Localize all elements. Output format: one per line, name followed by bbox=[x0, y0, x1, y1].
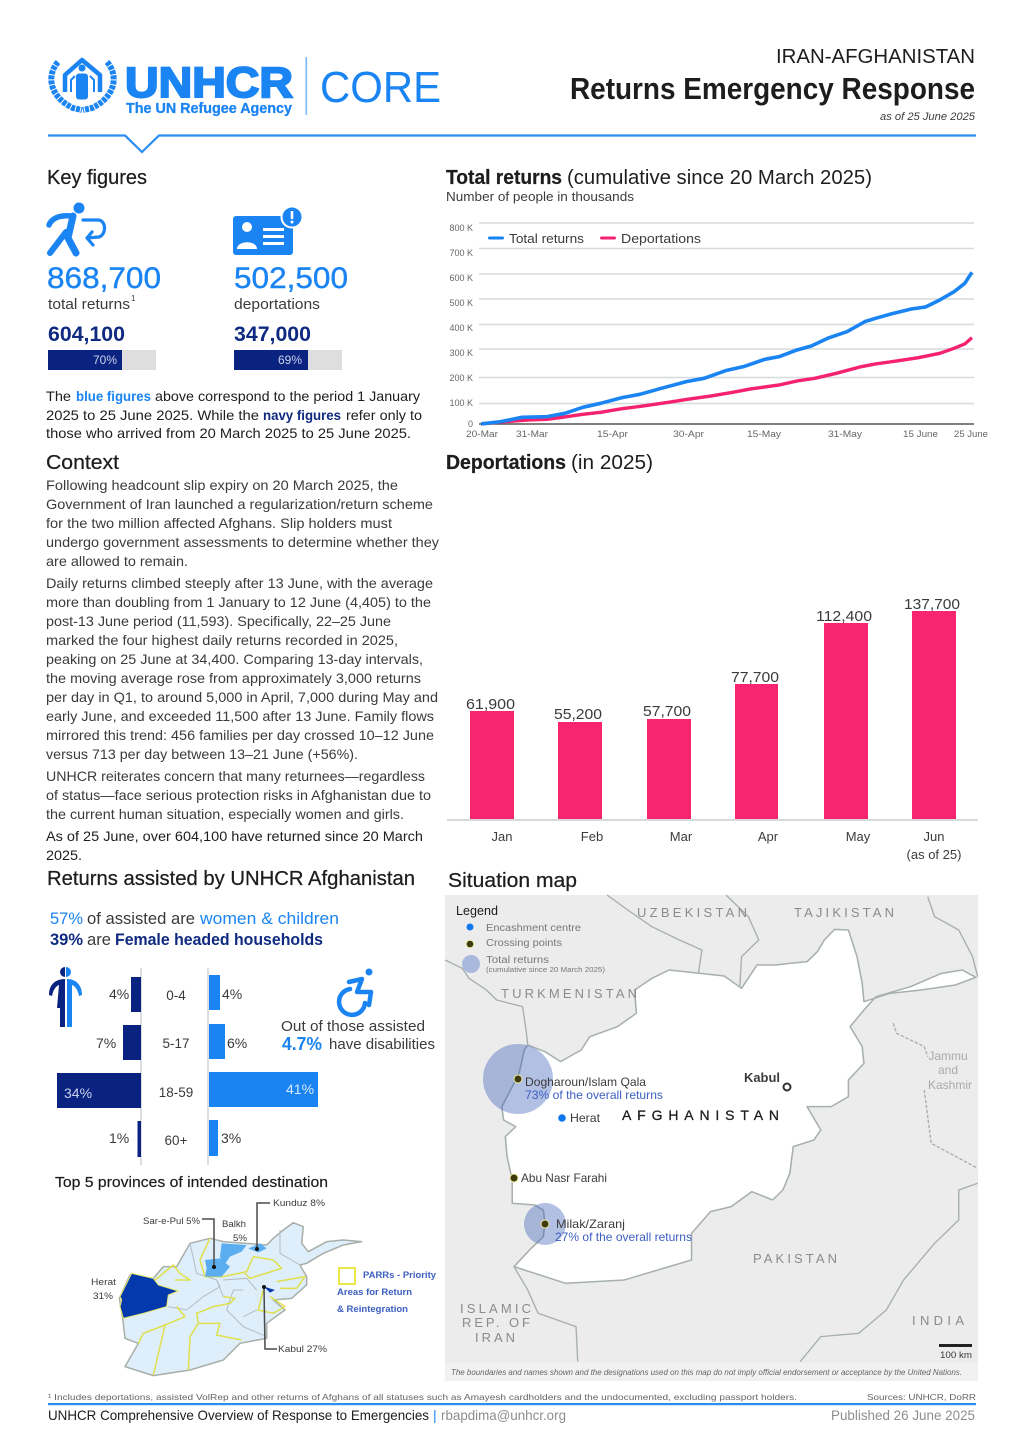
panel: total returns line chart bbox=[446, 166, 988, 439]
return circles bbox=[483, 1044, 553, 1114]
footer bbox=[48, 1392, 976, 1423]
country labels: Jammu bbox=[928, 1049, 968, 1063]
y axis labels: 0 bbox=[468, 419, 473, 429]
disability note bbox=[281, 1018, 435, 1054]
series: total returns bbox=[481, 272, 972, 424]
pyramid values: 7% bbox=[96, 1035, 116, 1051]
stat: total returns bbox=[47, 262, 161, 370]
y axis labels: 500 K bbox=[449, 298, 473, 308]
age groups bbox=[159, 988, 193, 1148]
y axis labels: 100 K bbox=[449, 398, 473, 408]
country labels: UZBEKISTAN bbox=[637, 905, 747, 920]
icon: woman and man bbox=[49, 967, 82, 1027]
provinces map: Kabul 27% bbox=[278, 1344, 327, 1354]
logo wordmark bbox=[125, 57, 441, 117]
key figures note: above correspond to the period 1 January bbox=[155, 388, 420, 404]
chart legend: Deportations bbox=[621, 231, 702, 246]
map legend: (cumulative since 20 March 2025) bbox=[486, 967, 605, 974]
Afghanistan territory bbox=[502, 929, 976, 1283]
x axis labels: 31-May bbox=[828, 429, 863, 439]
footnote: ¹ Includes deportations, assisted VolRep and other returns of Afghans of all statuses such as Amayesh cardholders and the undocumented, excluding passport holders. bbox=[48, 1392, 797, 1402]
provinces map: Sar-e-Pul 5% bbox=[143, 1216, 200, 1226]
logo wordmark: UNHCR bbox=[125, 59, 293, 107]
heading: deportations: Deportations bbox=[446, 451, 566, 474]
crossing points bbox=[510, 1075, 549, 1228]
country labels bbox=[460, 905, 972, 1345]
report title bbox=[570, 46, 976, 123]
y axis labels: 600 K bbox=[449, 273, 473, 283]
PARRs legend: PARRs - Priority bbox=[363, 1270, 436, 1280]
map labels: Herat bbox=[570, 1111, 601, 1125]
scale bar: 100 km bbox=[940, 1350, 972, 1360]
footer line: | bbox=[433, 1407, 437, 1423]
disability note: have disabilities bbox=[329, 1036, 435, 1053]
key figures note: those who arrived from 20 March 2025 to 25 June 2025. bbox=[46, 425, 411, 441]
icon: UNHCR emblem bbox=[51, 60, 114, 110]
stat: deportations: 347,000 bbox=[234, 323, 311, 346]
key figures note: blue figures bbox=[76, 388, 151, 404]
key figures note: The bbox=[46, 388, 71, 404]
x axis labels: 30-Apr bbox=[673, 429, 704, 439]
PARRs legend: Areas for Return bbox=[337, 1287, 412, 1297]
age groups: 18-59 bbox=[159, 1085, 193, 1100]
map labels: Abu Nasr Farahi bbox=[521, 1171, 607, 1185]
age groups: 60+ bbox=[165, 1133, 188, 1148]
report title: Returns Emergency Response bbox=[570, 71, 975, 106]
country labels: and bbox=[938, 1063, 958, 1077]
context text: per day in Q1, to around 5,000 in April, 7,000 during May and bbox=[46, 689, 438, 705]
heading: total returns: Total returns bbox=[446, 166, 562, 189]
country labels: AFGHANISTAN bbox=[622, 1107, 779, 1123]
stat: total returns: 70% bbox=[93, 353, 117, 367]
PARRs legend bbox=[337, 1268, 436, 1314]
map disclaimer bbox=[445, 1363, 978, 1381]
key figures note: refer only to bbox=[346, 407, 422, 423]
bar values: 137,700 bbox=[904, 596, 960, 613]
heading: total returns: Number of people in thousands bbox=[446, 189, 635, 204]
map labels: Kabul bbox=[744, 1070, 780, 1085]
heading: returns assisted: Returns assisted by UNHCR Afghanistan bbox=[47, 867, 415, 890]
bar values: 112,400 bbox=[816, 608, 872, 625]
report title: as of 25 June 2025 bbox=[880, 111, 976, 123]
disability note: Out of those assisted bbox=[281, 1018, 425, 1035]
context text: the current human situation, especially women and girls. bbox=[46, 806, 404, 822]
bar chart bbox=[447, 596, 978, 862]
stat: total returns: 1 bbox=[131, 294, 136, 303]
assisted summary: Female headed households bbox=[115, 930, 323, 949]
bar values bbox=[466, 596, 960, 723]
context text: peaking on 25 June at 34,400. Comparing 13-day intervals, bbox=[46, 651, 423, 667]
assisted summary: of assisted are bbox=[87, 909, 195, 928]
country labels: TURKMENISTAN bbox=[501, 986, 637, 1001]
map legend: Encashment centre bbox=[486, 922, 581, 934]
y axis labels: 200 K bbox=[449, 373, 473, 383]
pyramid values: 4% bbox=[109, 986, 129, 1002]
provinces map: Kunduz 8% bbox=[273, 1198, 325, 1208]
provinces map: Balkh bbox=[222, 1219, 246, 1229]
footer line: rbapdima@unhcr.org bbox=[441, 1407, 566, 1423]
map labels: 27% of the overall returns bbox=[555, 1230, 692, 1244]
heading: total returns bbox=[446, 166, 872, 204]
context text: more than doubling from 1 January to 12 June (4,405) to the bbox=[46, 594, 431, 610]
bar values: 61,900 bbox=[466, 696, 515, 713]
y axis labels: 300 K bbox=[449, 348, 473, 358]
country labels: Kashmir bbox=[928, 1078, 972, 1092]
month labels: Jan bbox=[492, 829, 512, 844]
Kabul symbol bbox=[784, 1084, 790, 1090]
map labels: Milak/Zaranj bbox=[556, 1217, 625, 1231]
x axis labels: 31-Mar bbox=[516, 429, 548, 439]
footer line bbox=[48, 1407, 975, 1423]
stat: deportations: 502,500 bbox=[234, 262, 348, 295]
header rule with chevron bbox=[48, 136, 976, 152]
x axis labels: 15 June bbox=[903, 429, 938, 439]
pyramid values: 6% bbox=[227, 1035, 247, 1051]
heading: top 5 provinces: Top 5 provinces of intended destination bbox=[55, 1174, 328, 1191]
sources: Sources: UNHCR, DoRR bbox=[867, 1392, 976, 1402]
provinces map: 31% bbox=[93, 1291, 113, 1301]
age pyramid bbox=[57, 968, 318, 1165]
context text: mirrored this trend: 456 families per day crossed 10–12 June bbox=[46, 727, 434, 743]
assisted summary: 57% bbox=[50, 909, 83, 928]
country labels: TAJIKISTAN bbox=[794, 905, 894, 920]
context text: marked the four highest daily returns recorded in 2025, bbox=[46, 632, 398, 648]
heading: context: Context bbox=[46, 451, 119, 474]
panel: context bbox=[46, 451, 439, 863]
y axis labels: 800 K bbox=[449, 223, 473, 233]
map legend: Legend bbox=[456, 903, 498, 918]
country labels: ISLAMIC bbox=[460, 1301, 531, 1316]
context text: versus 713 per day between 13–21 June (+56%). bbox=[46, 746, 358, 762]
map legend: Crossing points bbox=[486, 937, 562, 949]
logo wordmark: The UN Refugee Agency bbox=[126, 100, 293, 117]
icon: ID card with alert bbox=[233, 206, 302, 255]
heading: deportations: (in 2025) bbox=[571, 451, 653, 474]
x axis labels: 15-Apr bbox=[597, 429, 628, 439]
pyramid values: 41% bbox=[286, 1081, 314, 1097]
disability note: 4.7% bbox=[282, 1034, 322, 1054]
y axis labels bbox=[449, 223, 473, 429]
context text: post-13 June period (11,593). Specifically, 22–25 June bbox=[46, 613, 391, 629]
month labels: Jun bbox=[924, 829, 944, 844]
context text: for the two million affected Afghans. Slip holders must bbox=[46, 515, 392, 531]
context text: Following headcount slip expiry on 20 March 2025, the bbox=[46, 477, 398, 493]
map labels bbox=[521, 1070, 780, 1244]
context text: 2025. bbox=[46, 847, 82, 863]
stat: deportations bbox=[234, 262, 348, 370]
heading: key figures: Key figures bbox=[47, 166, 147, 189]
map legend bbox=[456, 903, 605, 974]
x axis labels: 25 June bbox=[954, 429, 988, 439]
pyramid values: 3% bbox=[221, 1130, 241, 1146]
x axis labels: 15-May bbox=[747, 429, 782, 439]
stat: deportations: 69% bbox=[278, 353, 302, 367]
country labels: PAKISTAN bbox=[753, 1251, 837, 1266]
assisted summary bbox=[50, 909, 339, 949]
pyramid values: 4% bbox=[222, 986, 242, 1002]
bar values: 77,700 bbox=[731, 669, 779, 686]
month labels: (as of 25) bbox=[907, 847, 961, 862]
map labels: Dogharoun/Islam Qala bbox=[525, 1075, 646, 1089]
stat: deportations: deportations bbox=[234, 296, 320, 313]
line chart bbox=[449, 223, 988, 439]
context text: undergo government assessments to determine whether they bbox=[46, 534, 439, 550]
age groups: 0-4 bbox=[166, 988, 186, 1003]
context text: UNHCR reiterates concern that many returnees—regardless bbox=[46, 768, 425, 784]
context text: the moving average rose from approximately 3,000 returns bbox=[46, 670, 421, 686]
stat: total returns: total returns bbox=[48, 296, 130, 313]
key figures note bbox=[46, 388, 422, 441]
stat: total returns: 868,700 bbox=[47, 262, 161, 295]
panel: situation map bbox=[445, 869, 978, 1381]
pyramid values: 34% bbox=[64, 1085, 92, 1101]
y axis labels: 700 K bbox=[449, 248, 473, 258]
bar values: 55,200 bbox=[554, 706, 602, 723]
header bbox=[48, 46, 976, 152]
map bbox=[445, 895, 978, 1381]
provinces map: 5% bbox=[233, 1233, 247, 1243]
month labels: Feb bbox=[581, 829, 603, 844]
provinces map: Herat bbox=[91, 1277, 117, 1287]
heading: deportations bbox=[446, 451, 653, 474]
panel: returns assisted bbox=[47, 867, 436, 1376]
map labels: 73% of the overall returns bbox=[525, 1088, 663, 1102]
context text: As of 25 June, over 604,100 have returned since 20 March bbox=[46, 828, 423, 844]
map legend: Total returns bbox=[486, 954, 549, 966]
chart legend bbox=[488, 231, 702, 246]
month labels: Apr bbox=[758, 829, 779, 844]
province callouts bbox=[202, 1203, 277, 1349]
key figures note: navy figures bbox=[263, 407, 341, 423]
y axis labels: 400 K bbox=[449, 323, 473, 333]
context text bbox=[46, 477, 439, 863]
footer line: UNHCR Comprehensive Overview of Response to Emergencies bbox=[48, 1407, 429, 1423]
report title: IRAN-AFGHANISTAN bbox=[776, 46, 975, 68]
context text: Daily returns climbed steeply after 13 June, with the average bbox=[46, 575, 433, 591]
footer line: Published 26 June 2025 bbox=[831, 1407, 975, 1423]
country labels: INDIA bbox=[912, 1313, 964, 1328]
key figures note: 2025 to 25 June 2025. While the bbox=[46, 407, 259, 423]
month labels bbox=[492, 829, 961, 862]
PARRs legend: & Reintegration bbox=[337, 1304, 408, 1314]
assisted summary: 39% bbox=[50, 930, 83, 949]
month labels: Mar bbox=[670, 829, 693, 844]
panel: key figures bbox=[46, 166, 422, 441]
neighbouring borders bbox=[445, 895, 978, 1362]
pyramid values: 1% bbox=[109, 1130, 129, 1146]
assisted summary: are bbox=[87, 930, 111, 949]
scale bar bbox=[939, 1344, 972, 1360]
Herat encashment centre bbox=[558, 1114, 566, 1122]
stat: total returns: 604,100 bbox=[48, 323, 125, 346]
pyramid values bbox=[64, 986, 314, 1146]
map disclaimer: The boundaries and names shown and the designations used on this map do not imply official endorsement or acceptance by the United Nations. bbox=[451, 1368, 962, 1377]
x axis labels bbox=[466, 429, 988, 439]
icon: wheelchair bbox=[339, 968, 372, 1015]
context text: of status—face serious protection risks in Afghanistan due to bbox=[46, 787, 431, 803]
country labels: REP. OF bbox=[462, 1315, 530, 1330]
series: deportations bbox=[481, 338, 972, 424]
heading: situation map: Situation map bbox=[448, 869, 577, 892]
context text: early June, and exceeded 11,500 after 13 June. Family flows bbox=[46, 708, 434, 724]
assisted summary: women & children bbox=[199, 909, 339, 928]
age groups: 5-17 bbox=[162, 1036, 190, 1051]
panel: deportations bar chart bbox=[446, 451, 978, 862]
chart legend: Total returns bbox=[509, 231, 585, 246]
bar values: 57,700 bbox=[643, 703, 691, 720]
provinces map bbox=[91, 1198, 436, 1376]
heading: total returns: (cumulative since 20 March 2025) bbox=[567, 166, 872, 189]
context text: are allowed to remain. bbox=[46, 553, 188, 569]
logo wordmark: CORE bbox=[320, 63, 441, 112]
x axis labels: 20-Mar bbox=[466, 429, 498, 439]
context text: Government of Iran launched a regularization/return scheme bbox=[46, 496, 433, 512]
icon: returning person bbox=[49, 202, 105, 253]
month labels: May bbox=[846, 829, 871, 844]
country labels: IRAN bbox=[475, 1330, 515, 1345]
